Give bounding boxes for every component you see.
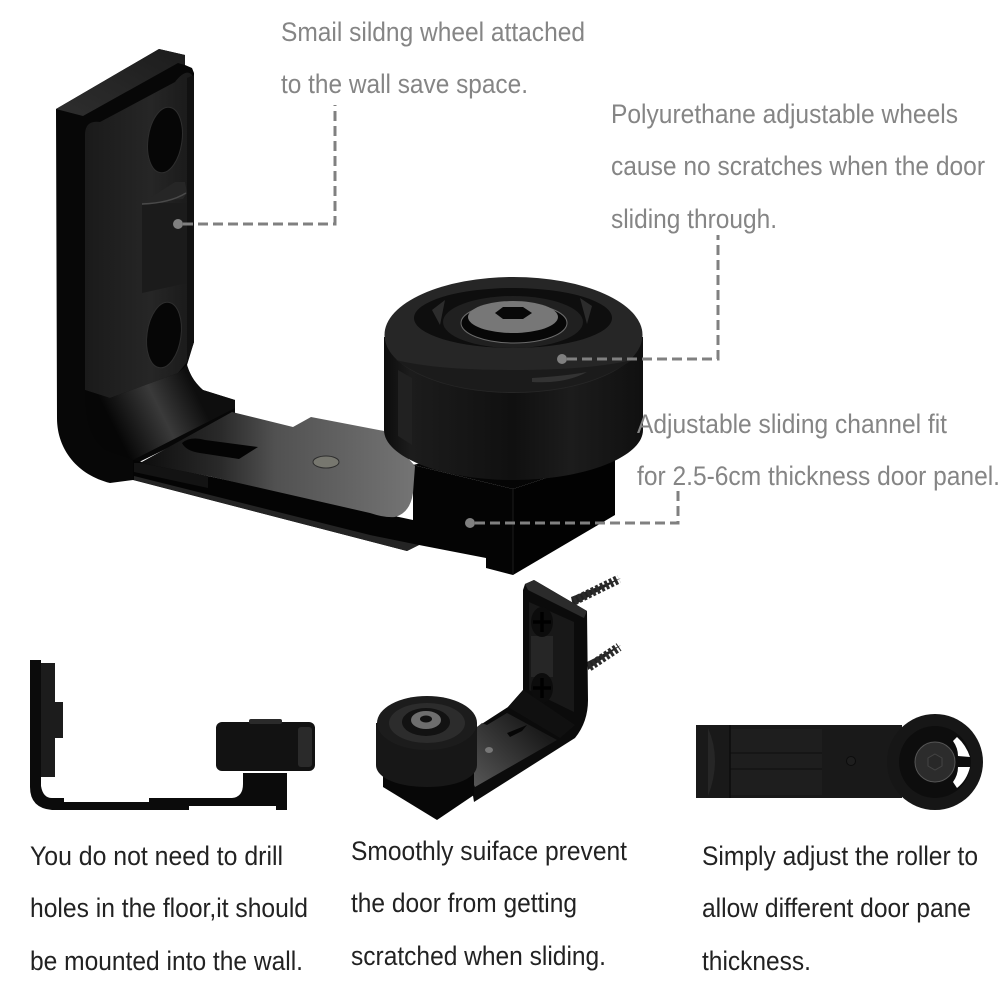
callout text: adjustable channel [637, 409, 1000, 491]
slot [507, 725, 527, 737]
hub [915, 742, 955, 782]
hub ring [443, 296, 583, 348]
rim lower shadow [396, 360, 632, 392]
side view wheel [216, 722, 315, 771]
lower wall screw [143, 300, 185, 370]
side view clip [55, 702, 63, 738]
wheel outer [887, 714, 983, 810]
side view image of the guide [30, 660, 315, 810]
callout 1 dashed leader to wall clip [173, 105, 335, 229]
callout text: small sliding wheel [281, 17, 585, 99]
adjustment slot [182, 439, 258, 459]
wheel highlights [398, 370, 587, 445]
base lower rail highlight [134, 476, 419, 551]
cross screw top [531, 607, 553, 637]
callout text: polyurethane wheels [611, 99, 985, 234]
centre clip on wall plate [142, 182, 187, 293]
bolt head [468, 301, 558, 333]
caption: side view: You do not need to drill [30, 841, 283, 871]
side view wheel highlight [298, 727, 312, 767]
bracket arm [470, 580, 588, 802]
caption: isometric view: scratched when sliding. [351, 941, 606, 971]
wheel body [384, 337, 643, 480]
callout text: polyurethane wheels: Polyurethane adjustable wheels [611, 99, 958, 129]
bracket top edge [525, 580, 587, 618]
wheel mount block right face [513, 455, 615, 575]
channel section [730, 725, 822, 798]
callout 3 dashed leader to channel [465, 490, 678, 528]
side view bolt [249, 719, 282, 724]
callout 2 dashed leader to wheel [557, 235, 718, 364]
caption: isometric view: the door from getting [351, 888, 577, 918]
raised wall plate [85, 73, 194, 398]
glossy inner corner [508, 690, 575, 738]
bracket top edge [56, 49, 185, 116]
sliding plate [140, 412, 415, 517]
rivet [846, 756, 856, 766]
hex socket [420, 716, 432, 722]
wall clip [531, 636, 553, 677]
rivet [485, 747, 493, 753]
wheel mount block top [413, 440, 615, 489]
callout text: adjustable channel: Adjustable sliding channel fit [637, 409, 947, 439]
top view image of the guide [696, 714, 983, 810]
wheel face [377, 696, 477, 750]
upper screw [571, 578, 621, 606]
wheel cut-outs [953, 737, 970, 788]
rivet [313, 456, 339, 468]
black base under the plate [133, 460, 513, 575]
raised plate right strip [187, 75, 194, 362]
wheel body [376, 723, 477, 787]
caption: side view: holes in the floor,it should [30, 893, 308, 923]
wheel recess [389, 703, 465, 743]
main product image: door guide bracket with wheel [56, 49, 643, 575]
washer [461, 303, 567, 343]
hub [402, 708, 450, 736]
caption: top view: allow different door pane [702, 893, 971, 923]
block corner edge [512, 489, 514, 575]
recess ribs [432, 298, 592, 325]
wheel recess [414, 288, 612, 348]
caption: side view: be mounted into the wall. [30, 946, 303, 976]
glossy inner corner of bracket [85, 365, 235, 460]
caption: side view [30, 841, 308, 976]
top view body [696, 725, 902, 798]
caption: top view: Simply adjust the roller to [702, 841, 978, 871]
wheel face rim [384, 277, 642, 393]
caption: isometric view: Smoothly suiface prevent [351, 836, 627, 866]
caption: top view [702, 841, 978, 976]
side view wall plate [41, 663, 55, 777]
base block [383, 760, 474, 820]
lower screw [587, 645, 621, 670]
callout text: small sliding wheel: Smail sildng wheel attached [281, 17, 585, 47]
wheel spokes recess [899, 726, 971, 798]
sliding plate [470, 713, 557, 787]
side view bracket profile [30, 660, 287, 810]
hex bolt [928, 754, 942, 770]
hex socket [495, 307, 532, 319]
caption: isometric view [351, 836, 627, 971]
caption: top view: thickness. [702, 946, 811, 976]
wall plate [529, 602, 574, 712]
upper wall screw [144, 105, 186, 175]
plate strip [134, 463, 208, 488]
bracket wall arm silhouette [56, 49, 235, 483]
cross screw bottom [531, 673, 553, 703]
bolt [411, 711, 441, 729]
end curve [708, 728, 715, 796]
isometric view image of the guide with screws [376, 578, 621, 820]
callout text: polyurethane wheels: sliding through. [611, 204, 777, 234]
callout text: small sliding wheel: to the wall save space. [281, 69, 528, 99]
